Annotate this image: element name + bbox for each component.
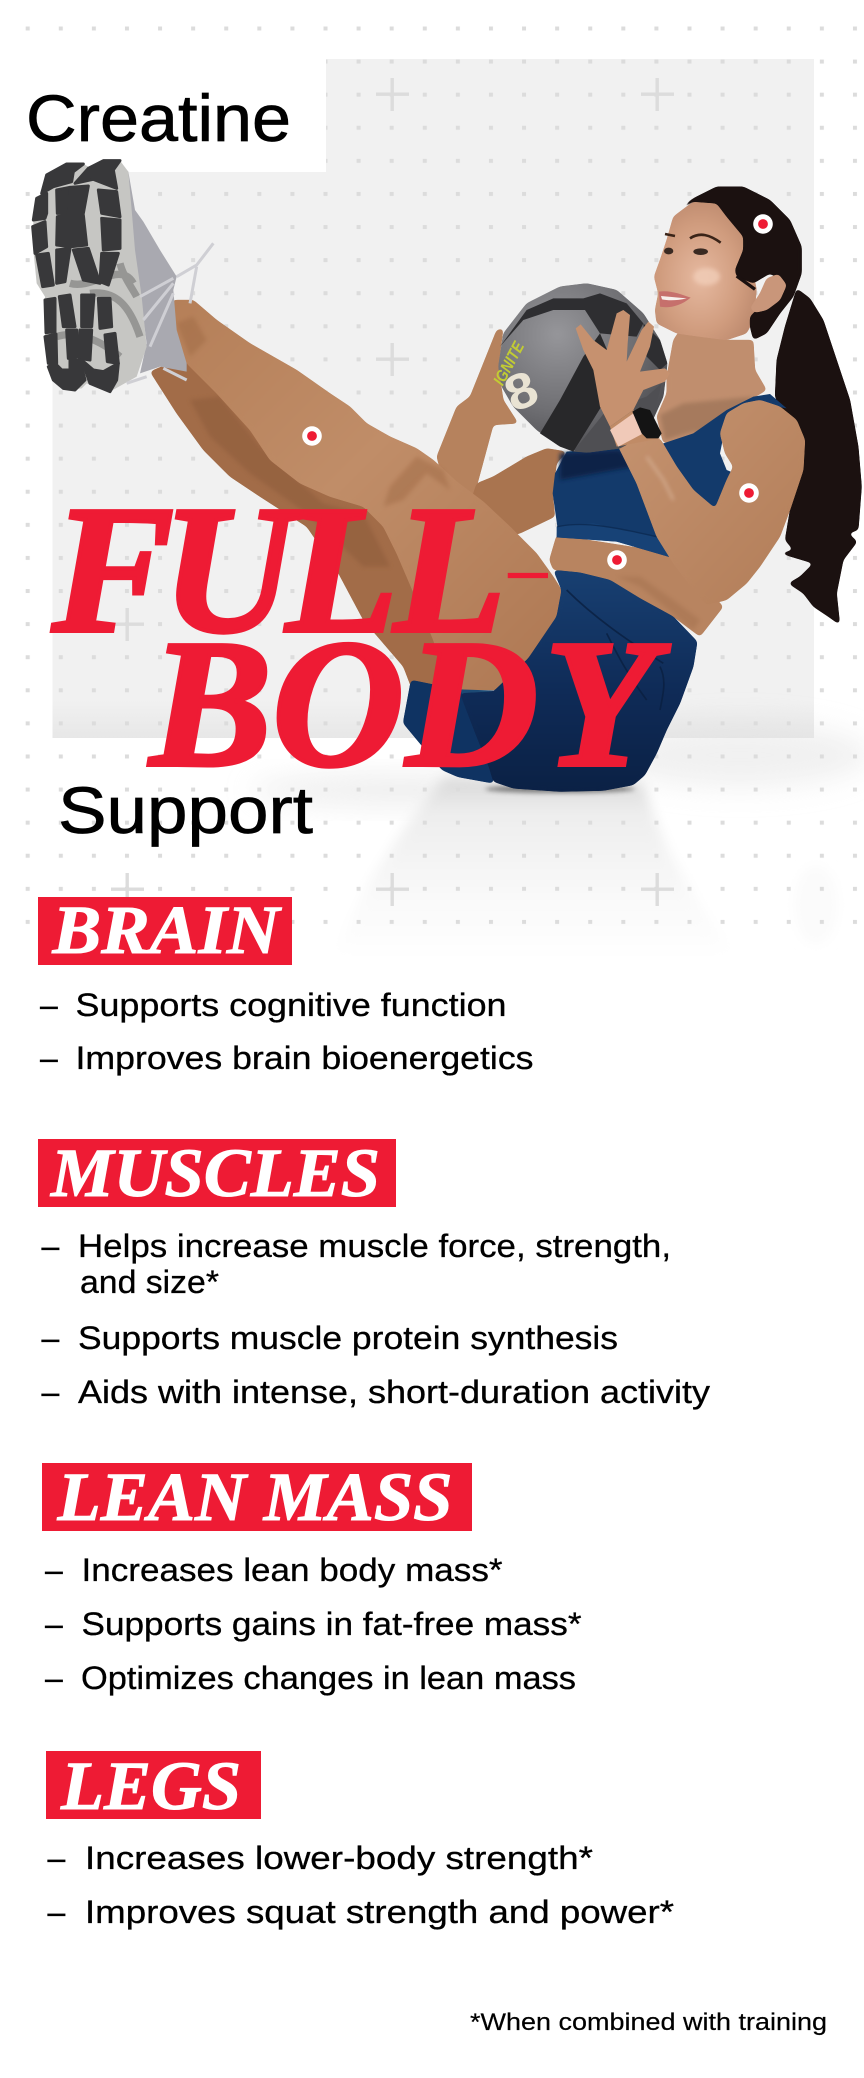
white title box xyxy=(0,40,326,172)
title: FULL-BODY: BODY xyxy=(148,602,670,805)
shoe laces xyxy=(127,243,213,383)
footnote: *When combined with training xyxy=(470,2009,827,2036)
section: muscles: – xyxy=(42,1374,60,1410)
section: muscles: Supports muscle protein synthesis xyxy=(78,1320,618,1356)
section: legs xyxy=(46,1748,674,1930)
far leg xyxy=(150,350,460,690)
far upper arm xyxy=(467,448,567,537)
neck and chest xyxy=(657,330,767,443)
section: muscles: MUSCLES xyxy=(50,1135,380,1211)
medicine ball: IGNITE xyxy=(489,338,528,389)
title: FULL-BODY: FULL xyxy=(51,468,506,671)
section: legs: LEGS xyxy=(60,1748,241,1824)
section: lean mass: – xyxy=(45,1552,63,1588)
shoe sole xyxy=(33,161,147,392)
section: lean mass xyxy=(42,1459,582,1696)
shoe upper xyxy=(120,163,187,373)
midriff xyxy=(549,535,723,637)
medicine ball: 8 xyxy=(497,360,546,423)
title: FULL-BODY xyxy=(51,468,670,805)
title: Support: Support xyxy=(58,773,313,847)
section: brain: – xyxy=(40,987,58,1023)
contact shadow under shorts xyxy=(485,785,635,793)
figure: woman with medicine ball xyxy=(33,161,862,793)
panel: gray backdrop xyxy=(52,59,814,738)
section: muscles: and size* xyxy=(80,1264,219,1300)
section: legs: – xyxy=(48,1840,66,1876)
shoe lugs xyxy=(33,161,120,392)
body markers xyxy=(302,214,773,570)
section: lean mass: – xyxy=(45,1606,63,1642)
section: brain xyxy=(38,892,534,1076)
near leg xyxy=(170,300,562,690)
section: muscles: Aids with intense, short-duration activity xyxy=(78,1374,710,1410)
section: lean mass: Optimizes changes in lean mass xyxy=(81,1660,576,1696)
near arm xyxy=(617,400,805,605)
hand on ball, wristband and watch xyxy=(576,310,670,447)
section: brain: Improves brain bioenergetics xyxy=(76,1040,534,1076)
floor shadow and reflection xyxy=(250,723,864,960)
dot grid xyxy=(20,20,864,926)
section: muscles: – xyxy=(42,1320,60,1356)
sports top xyxy=(553,394,787,557)
section: legs: Increases lower-body strength* xyxy=(85,1840,593,1876)
section: legs: – xyxy=(48,1894,66,1930)
section: brain: Supports cognitive function xyxy=(76,987,507,1023)
section: lean mass: Increases lean body mass* xyxy=(82,1552,502,1588)
section: lean mass: – xyxy=(45,1660,63,1696)
shoes xyxy=(33,161,213,392)
section: brain: – xyxy=(40,1040,58,1076)
title: Creatine: Creatine xyxy=(26,81,291,155)
section: muscles: Helps increase muscle force, strength, xyxy=(78,1228,671,1264)
head xyxy=(654,187,802,340)
title: FULL-BODY: - xyxy=(502,530,554,608)
shorts xyxy=(403,570,697,792)
medicine ball xyxy=(489,283,667,453)
section: legs: Improves squat strength and power* xyxy=(85,1894,674,1930)
section: lean mass: Supports gains in fat-free mass* xyxy=(82,1606,582,1642)
section: lean mass: LEAN MASS xyxy=(56,1459,453,1535)
far forearm and hand xyxy=(437,328,518,513)
section: brain: BRAIN xyxy=(51,892,282,968)
plus markers xyxy=(111,78,674,906)
ponytail xyxy=(775,288,862,625)
section: muscles: – xyxy=(42,1228,60,1264)
section: muscles xyxy=(38,1135,710,1410)
